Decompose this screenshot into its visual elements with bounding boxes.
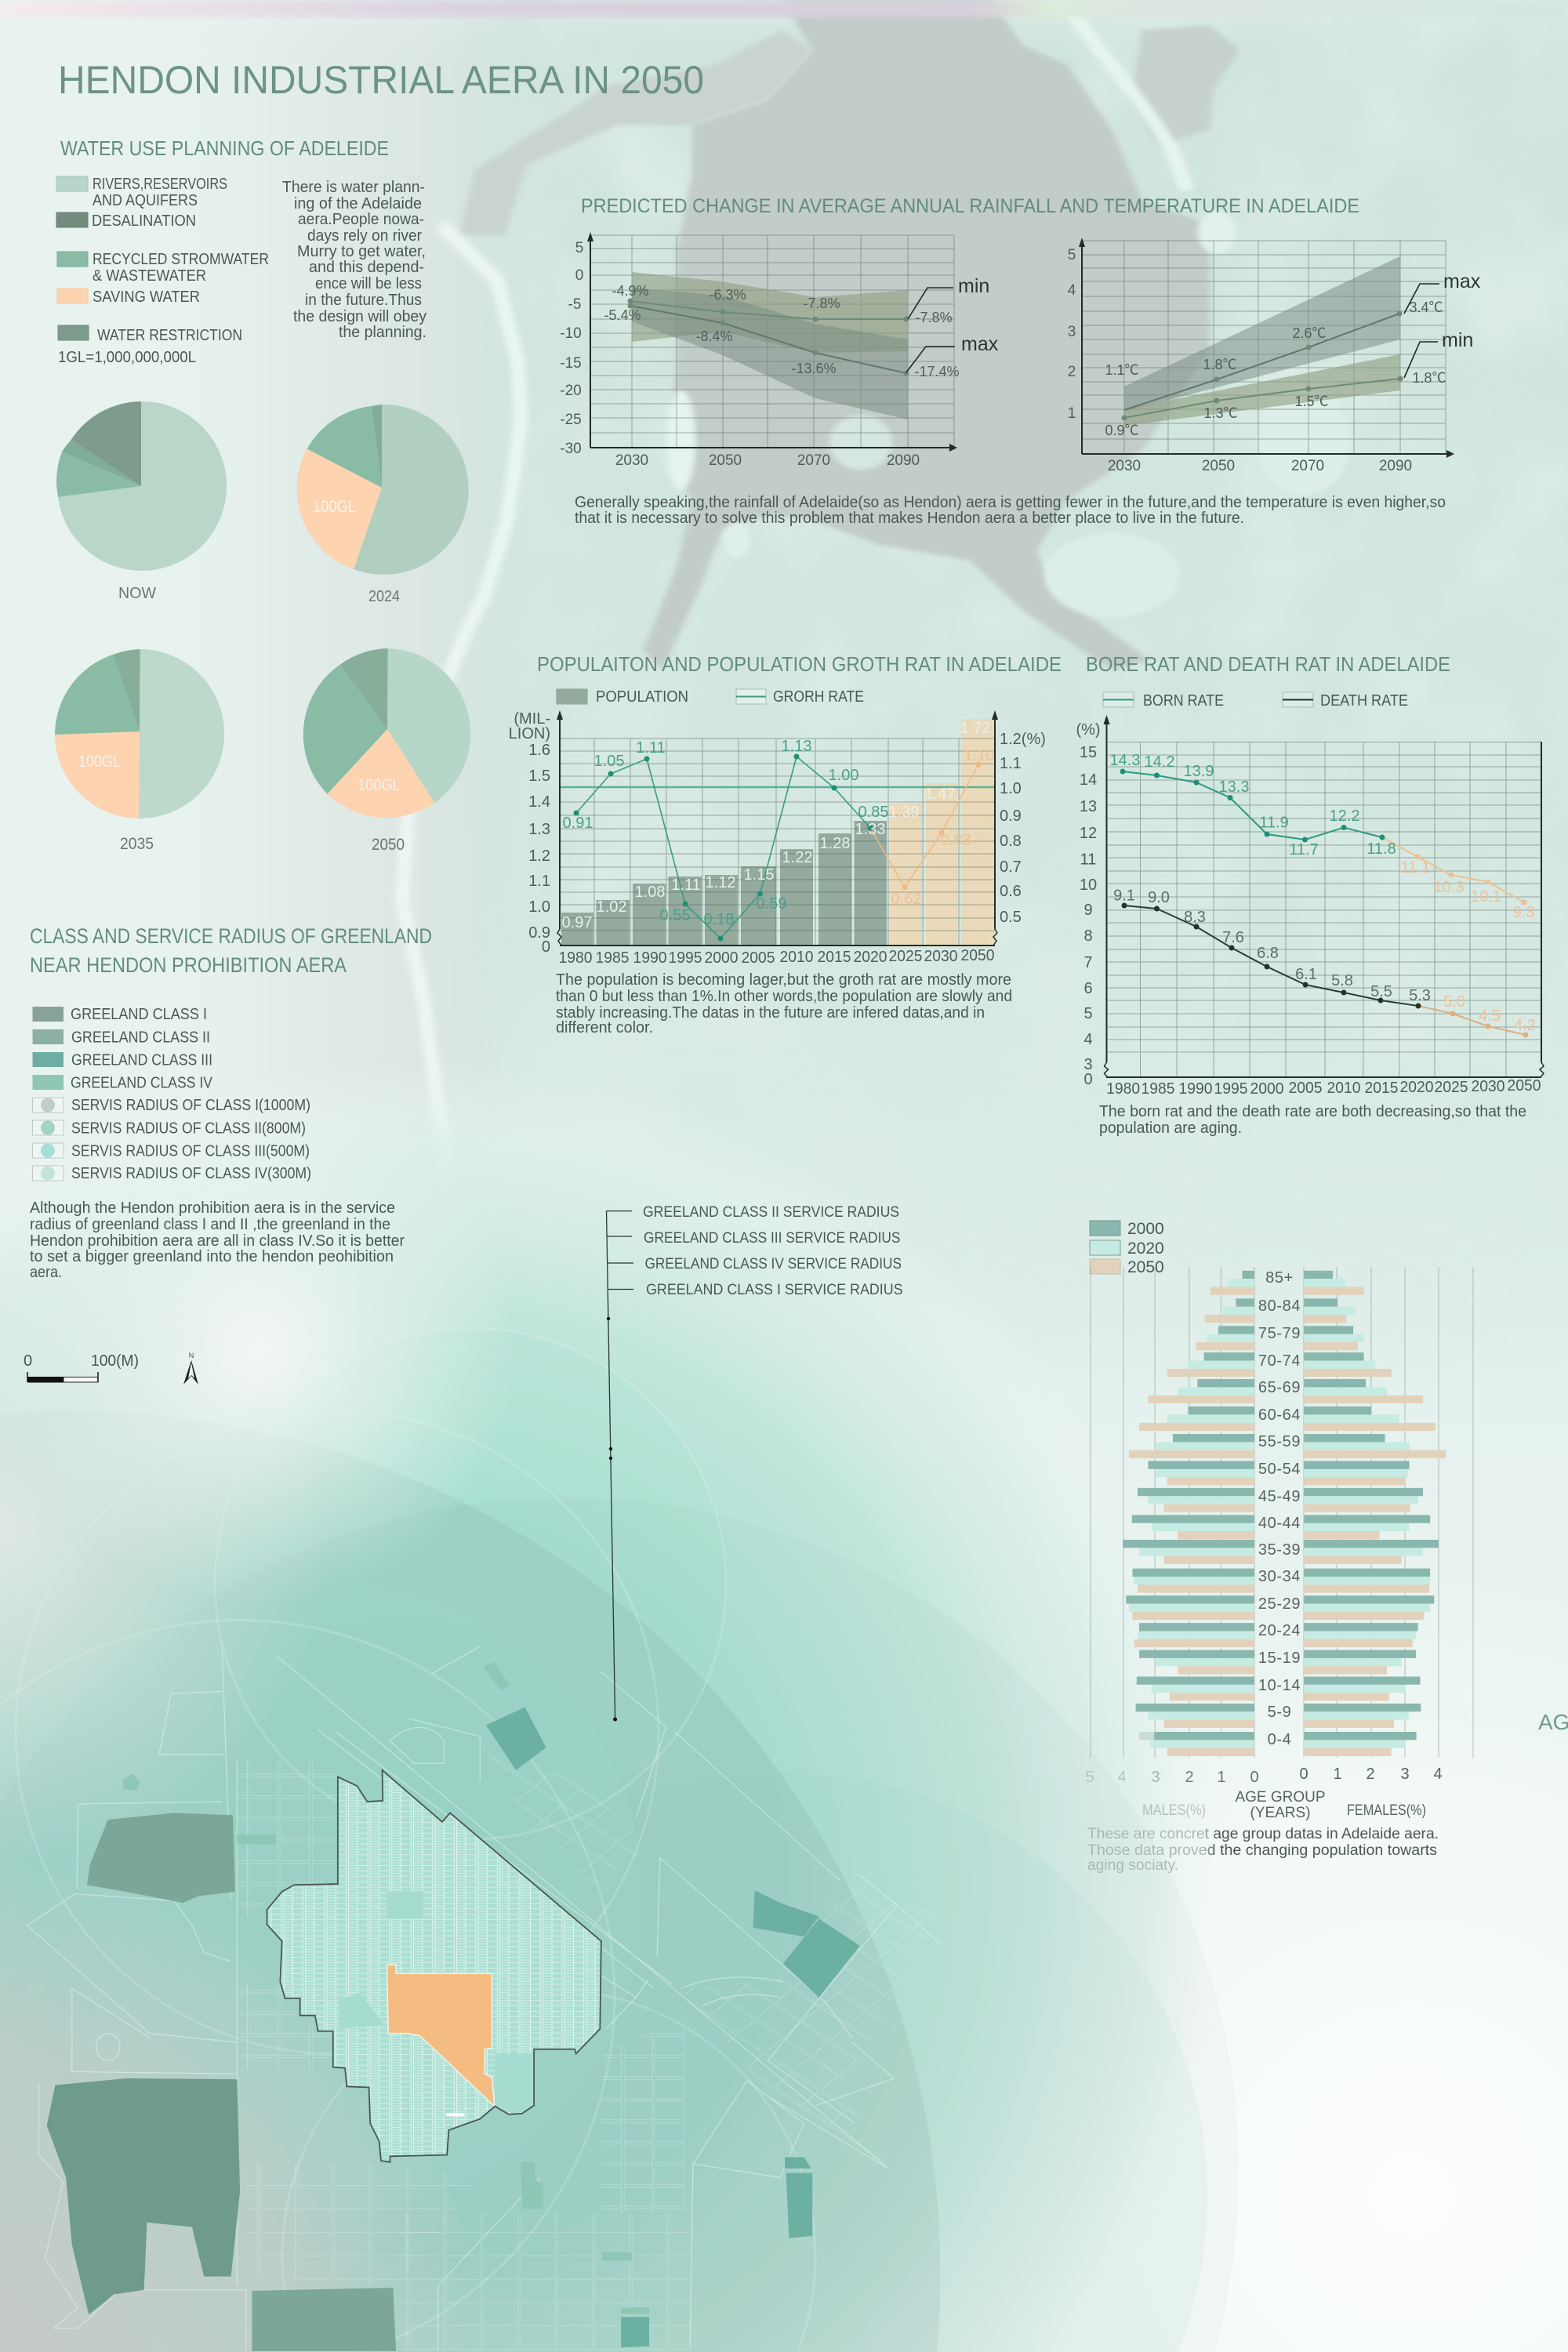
text block: pyramid note: Those data proved the changing population towarts bbox=[1087, 1842, 1437, 1859]
chart: temperature change: 2090 bbox=[1379, 458, 1412, 474]
chart: temperature change: 1.5℃ bbox=[1294, 394, 1329, 409]
chart: rainfall change: -30 bbox=[560, 441, 582, 457]
axis labels: percent: FEMALES(%) bbox=[1347, 1802, 1426, 1819]
prohibition area boundary bbox=[267, 1770, 601, 2162]
text block: water planning note: ence will be less bbox=[315, 275, 422, 292]
heading: greenland class: NEAR HENDON PROHIBITION AERA bbox=[30, 953, 347, 977]
chart: population and growth rate: 1.15 bbox=[744, 866, 774, 884]
callouts: service radius leader bbox=[607, 1204, 903, 1722]
legend: pyramid years: 2020 bbox=[1127, 1240, 1164, 1258]
heading: rainfall and temperature: PREDICTED CHANGE IN AVERAGE ANNUAL RAINFALL AND TEMPERATURE IN ADELAIDE bbox=[581, 195, 1359, 217]
axis labels: birth and death: 2005 bbox=[1289, 1080, 1322, 1097]
chart: temperature change: 1.8℃ bbox=[1412, 370, 1446, 386]
pie chart: 2050 bbox=[303, 648, 470, 854]
axis labels: age groups: 70-74 bbox=[1258, 1352, 1301, 1370]
streets: outer blocks bbox=[27, 1646, 941, 2350]
chart: birth and death rate: 11.7 bbox=[1289, 841, 1319, 858]
chart: population and growth rate bbox=[509, 688, 1046, 967]
text block: population note: The population is becoming lager,but the groth rat are mostly more bbox=[556, 971, 1011, 989]
chart: rainfall change: -6.3% bbox=[709, 287, 746, 303]
chart: rainfall change: -20 bbox=[560, 383, 582, 399]
axis labels: percent: 1 bbox=[1217, 1769, 1226, 1786]
axis labels: percent: 0 bbox=[1250, 1769, 1259, 1786]
axis labels: population: 1.0 bbox=[528, 898, 550, 916]
pie chart: 2024 bbox=[297, 405, 469, 605]
icon: north arrow bbox=[183, 1352, 198, 1385]
axis labels: age groups: 65-69 bbox=[1258, 1379, 1301, 1396]
axis labels: birth and death: 2000 bbox=[1250, 1080, 1284, 1098]
axis labels: birth and death bbox=[1076, 721, 1541, 1098]
chart: birth and death rate: 4.5 bbox=[1479, 1007, 1501, 1025]
legend: pyramid years: 2000 bbox=[1127, 1220, 1164, 1238]
chart: population and growth rate: 1.33 bbox=[855, 821, 885, 838]
chart: birth and death rate: 11.8 bbox=[1367, 840, 1396, 858]
legend: water sources: WATER RESTRICTION bbox=[97, 327, 242, 344]
legend: water sources: 1GL=1,000,000,000L bbox=[58, 349, 196, 366]
chart: population and growth rate: 0.5 bbox=[1000, 909, 1022, 926]
legend: greenland classes and service radius: GREELAND CLASS III bbox=[71, 1052, 212, 1069]
chart: birth and death rate: 14.2 bbox=[1145, 753, 1174, 771]
orange site bbox=[387, 1965, 495, 2107]
text block: water planning note: the design will obey bbox=[293, 308, 426, 325]
pie chart: 2035 bbox=[55, 649, 224, 853]
chart: temperature change: 4 bbox=[1068, 282, 1076, 299]
axis labels: birth and death: (%) bbox=[1076, 721, 1101, 739]
legend: greenland classes and service radius: SERVIS RADIUS OF CLASS IV(300M) bbox=[71, 1165, 311, 1182]
chart: temperature change: 5 bbox=[1068, 247, 1076, 263]
text block: greenland note: aera. bbox=[30, 1264, 62, 1281]
greenland: class II bbox=[87, 1813, 396, 2351]
axis labels: percent: (YEARS) bbox=[1250, 1805, 1311, 1821]
chart: population and growth rate: 0.7 bbox=[1000, 858, 1022, 876]
chart: population and growth rate: 0.91 bbox=[563, 815, 593, 832]
chart: rainfall change: 0 bbox=[575, 267, 583, 284]
chart: population and growth rate: 0.18 bbox=[704, 911, 734, 928]
scale bar bbox=[24, 1352, 139, 1383]
legend: water sources bbox=[56, 176, 269, 366]
axis labels: percent: MALES(%) bbox=[1142, 1802, 1206, 1819]
chart: birth and death rate: 5.5 bbox=[1370, 983, 1392, 1000]
chart: rainfall change: -5 bbox=[568, 296, 581, 313]
chart: birth and death rate: 9.0 bbox=[1148, 889, 1170, 906]
legend: water sources: DESALINATION bbox=[92, 212, 196, 230]
axis labels: age groups: 85+ bbox=[1265, 1269, 1294, 1287]
axis labels: birth and death: 5 bbox=[1083, 1005, 1093, 1022]
legend: water sources: RIVERS,RESERVOIRS bbox=[93, 176, 227, 193]
chart: population and growth rate: 0.62 bbox=[891, 891, 921, 908]
chart: temperature change: 1.8℃ bbox=[1203, 357, 1237, 372]
axis labels: age groups: 5-9 bbox=[1268, 1704, 1291, 1721]
chart: population and growth rate: 1.1 bbox=[1000, 755, 1022, 772]
axis labels: birth and death: 2020 bbox=[1400, 1079, 1433, 1096]
chart: temperature change: 2030 bbox=[1108, 458, 1141, 474]
axis labels: percent: 1 bbox=[1333, 1766, 1342, 1783]
heading: water use: WATER USE PLANNING OF ADELEIDE bbox=[60, 136, 389, 160]
axis labels: birth and death: 9 bbox=[1083, 902, 1093, 919]
white marker bbox=[446, 2113, 464, 2116]
axis labels: birth and death: 0 bbox=[1083, 1071, 1093, 1088]
text block: rainfall summary: that it is necessary to solve this problem that makes Hendon aera a better place to live in the future. bbox=[575, 510, 1244, 527]
chart: birth and death rate: 5.3 bbox=[1409, 987, 1431, 1004]
chart: population and growth rate: 1.12 bbox=[706, 874, 735, 891]
chart: rainfall change bbox=[560, 232, 999, 469]
axis labels: birth and death: 14 bbox=[1080, 771, 1097, 789]
axis labels: population: 1.3 bbox=[528, 821, 550, 838]
text block: water planning note: and this depend- bbox=[309, 259, 424, 276]
bars: population bbox=[561, 821, 887, 946]
axis labels: birth and death: 4 bbox=[1083, 1031, 1093, 1048]
chart: birth and death rate: 13.3 bbox=[1219, 779, 1249, 796]
axis labels: birth and death: 12 bbox=[1080, 825, 1097, 842]
chart: population and growth rate: 1.47 bbox=[925, 786, 955, 803]
chart: birth and death rate: 4.2 bbox=[1514, 1017, 1536, 1034]
heading: greenland class: CLASS AND SERVICE RADIUS OF GREENLAND bbox=[30, 924, 432, 948]
chart: population and growth rate: 0.59 bbox=[757, 895, 786, 913]
text block: water planning note: days rely on river bbox=[307, 227, 422, 245]
chart: population and growth rate: 1.02 bbox=[597, 898, 626, 916]
legend: greenland classes and service radius: SERVIS RADIUS OF CLASS II(800M) bbox=[71, 1120, 306, 1138]
pie chart: 2050: 2050 bbox=[372, 836, 405, 854]
axis labels: birth and death: 15 bbox=[1080, 744, 1097, 761]
chart: temperature change: 1 bbox=[1068, 405, 1076, 422]
axis labels: age groups: 75-79 bbox=[1258, 1325, 1301, 1342]
axis labels: percent: 5 bbox=[1085, 1769, 1094, 1786]
chart: population and growth rate: 1.28 bbox=[820, 835, 850, 852]
chart: rainfall change: 2030 bbox=[615, 452, 648, 469]
chart: population and growth rate: 1.72 bbox=[960, 720, 990, 737]
chart: rainfall change: -7.8% bbox=[803, 296, 840, 311]
axis labels: age groups: 60-64 bbox=[1258, 1406, 1301, 1424]
chart: birth and death rate: 5.0 bbox=[1443, 993, 1465, 1011]
chart: birth and death rate: 12.2 bbox=[1330, 808, 1359, 825]
axis labels: population: 1.6 bbox=[528, 742, 550, 759]
chart: rainfall change: -25 bbox=[560, 412, 582, 428]
chart: population and growth rate: 2020 bbox=[853, 949, 887, 966]
axis labels: birth and death: 2025 bbox=[1435, 1079, 1468, 1096]
axis labels: birth and death: 6 bbox=[1083, 980, 1093, 997]
axis labels: birth and death: 3 bbox=[1083, 1056, 1093, 1073]
legend: water sources: & WASTEWATER bbox=[93, 267, 206, 285]
axis labels: population: (MIL- bbox=[514, 710, 550, 728]
legend: water sources: AND AQUIFERS bbox=[93, 192, 198, 209]
chart: temperature change: 1.1℃ bbox=[1105, 362, 1139, 378]
axis labels: birth and death: 7 bbox=[1083, 954, 1093, 971]
axis labels: birth and death: 1980 bbox=[1106, 1080, 1140, 1098]
pie chart: 2035: 100GL bbox=[78, 753, 121, 771]
text block: pyramid note: aging sociaty. bbox=[1087, 1857, 1178, 1874]
text block: rainfall summary bbox=[575, 494, 1446, 527]
chart: birth and death rate: 9.1 bbox=[1113, 887, 1135, 905]
chart: temperature change: 2 bbox=[1068, 364, 1076, 380]
callout: max: max bbox=[1443, 270, 1481, 292]
text block: population note: different color. bbox=[556, 1019, 653, 1036]
axis labels: birth and death: 8 bbox=[1083, 927, 1093, 945]
icon: north arrow: N bbox=[189, 1352, 194, 1359]
axis labels: percent: 0 bbox=[1299, 1766, 1308, 1783]
chart: birth and death rate: 11.9 bbox=[1259, 814, 1289, 831]
chart: rainfall change: -7.8% bbox=[915, 310, 953, 325]
pie chart: 2024: 100GL bbox=[313, 498, 356, 516]
callout: min bbox=[908, 275, 989, 319]
axis labels: population: 1.5 bbox=[528, 768, 550, 785]
axis labels: age groups: 55-59 bbox=[1258, 1433, 1301, 1450]
pie chart: 2024: 2024 bbox=[368, 588, 400, 605]
text block: greenland note: radius of greenland class I and II ,the greenland in the bbox=[30, 1216, 390, 1233]
axis labels: percent: AGE GROUP bbox=[1235, 1789, 1326, 1806]
pie chart: now: NOW bbox=[118, 585, 156, 602]
chart: population and growth rate: 1985 bbox=[596, 949, 629, 967]
callout: min: min bbox=[958, 275, 989, 297]
callouts: service radius leader: GREELAND CLASS III SERVICE RADIUS bbox=[644, 1230, 900, 1247]
legend: population: GRORH RATE bbox=[773, 688, 864, 706]
chart: population and growth rate: 2050 bbox=[961, 947, 994, 964]
text block: greenland note: Hendon prohibition aera are all in class IV.So it is better bbox=[30, 1232, 405, 1250]
chart: population and growth rate: 1.05 bbox=[594, 753, 624, 770]
axis labels: population: 0.9 bbox=[528, 924, 550, 942]
chart: population and growth rate: 2015 bbox=[817, 949, 851, 966]
axis labels: percent: 2 bbox=[1185, 1769, 1194, 1786]
axis labels: population: 1.2 bbox=[528, 848, 550, 865]
text block: pyramid note: These are concret age group datas in Adelaide aera. bbox=[1087, 1826, 1439, 1842]
callout: min: min bbox=[1442, 329, 1473, 351]
callout: max: max bbox=[961, 333, 999, 355]
callouts: service radius leader: GREELAND CLASS I SERVICE RADIUS bbox=[646, 1282, 903, 1298]
chart: population and growth rate: 1.0 bbox=[1000, 780, 1022, 797]
greenland: class III bbox=[486, 1707, 860, 2347]
axis labels: age groups: 30-34 bbox=[1258, 1568, 1301, 1585]
axis labels: birth and death: 2010 bbox=[1327, 1080, 1361, 1097]
chart: rainfall change: -8.4% bbox=[695, 328, 733, 344]
chart: population and growth rate: 2030 bbox=[924, 948, 958, 965]
chart: population and growth rate: 1.39 bbox=[889, 804, 919, 821]
text block: water planning note: in the future.Thus bbox=[305, 292, 422, 309]
pie chart: 2035: 2035 bbox=[120, 835, 154, 853]
axis labels: percent: 4 bbox=[1117, 1769, 1127, 1786]
text block: water planning note bbox=[282, 179, 426, 341]
text block: birth and death note: population are aging. bbox=[1099, 1120, 1242, 1137]
map: Hendon greenland and street network bbox=[27, 1646, 941, 2351]
text block: water planning note: ing of the Adelaide bbox=[294, 195, 422, 212]
chart: temperature change: 0.9℃ bbox=[1105, 423, 1139, 438]
greenland: class IV bbox=[123, 1662, 649, 2314]
text block: birth and death note: The born rat and the death rate are both decreasing,so that the bbox=[1099, 1103, 1526, 1120]
pie chart: now bbox=[56, 401, 227, 602]
chart: population and growth rate: 2000 bbox=[704, 949, 739, 967]
chart: rainfall change: 2090 bbox=[887, 452, 920, 469]
axis labels: age groups: 25-29 bbox=[1258, 1595, 1301, 1613]
axis labels: birth and death: 11 bbox=[1080, 851, 1096, 869]
chart: population and growth rate: 0.55 bbox=[660, 907, 690, 924]
legend: greenland classes and service radius bbox=[33, 1006, 311, 1182]
chart: population and growth rate: 0.97 bbox=[562, 914, 592, 931]
chart: temperature change: 3 bbox=[1068, 324, 1076, 340]
chart: population and growth rate: 0.6 bbox=[1000, 883, 1022, 900]
heading: population: POPULAITON AND POPULATION GROTH RAT IN ADELAIDE bbox=[537, 652, 1062, 676]
chart: rainfall change: -15 bbox=[560, 355, 582, 372]
axis labels: age groups: 10-14 bbox=[1258, 1677, 1301, 1694]
legend: greenland classes and service radius: GREELAND CLASS IV bbox=[71, 1074, 213, 1091]
chart: rainfall change: -10 bbox=[560, 325, 582, 342]
axis labels: birth and death: 13 bbox=[1080, 798, 1097, 815]
axis labels: age groups bbox=[1258, 1269, 1301, 1748]
chart: birth and death rate bbox=[1076, 692, 1544, 1098]
text block: water planning note: the planning. bbox=[339, 324, 426, 341]
text block: water planning note: There is water plann- bbox=[282, 179, 425, 196]
axis labels: percent: 4 bbox=[1433, 1766, 1443, 1783]
chart: birth and death rate: 10.3 bbox=[1434, 879, 1464, 896]
axis labels: age groups: 40-44 bbox=[1258, 1515, 1301, 1532]
chart: birth and death rate: 7.6 bbox=[1222, 929, 1244, 946]
chart: population and growth rate: 1.00 bbox=[829, 767, 858, 784]
callout: max bbox=[1404, 270, 1481, 314]
chart: temperature change: 1.3℃ bbox=[1203, 405, 1238, 421]
axis labels: age groups: 20-24 bbox=[1258, 1622, 1301, 1639]
title: HENDON INDUSTRIAL AERA IN 2050 bbox=[58, 58, 704, 102]
axis labels: birth and death: 2050 bbox=[1507, 1077, 1541, 1094]
chart: population and growth rate: 0.9 bbox=[1000, 808, 1022, 825]
axis labels: age groups: 35-39 bbox=[1258, 1541, 1301, 1559]
text block: water planning note: Murry to get water, bbox=[297, 243, 426, 260]
axis labels: population: 1.1 bbox=[528, 873, 550, 890]
axis labels: age groups: 45-49 bbox=[1258, 1488, 1301, 1505]
chart: population and growth rate: 1.11 bbox=[636, 739, 666, 757]
text block: rainfall summary: Generally speaking,the rainfall of Adelaide(so as Hendon) aera is getting fewer in the future,and the temperature is even higher,so bbox=[575, 494, 1446, 511]
chart: population and growth rate: 1995 bbox=[668, 949, 702, 967]
text block: population note: stably increasing.The datas in the future are infered datas,and in bbox=[556, 1004, 985, 1022]
chart: population and growth rate: 1.08 bbox=[635, 884, 665, 901]
legend: birth and death bbox=[1103, 692, 1408, 710]
callouts: service radius leader: GREELAND CLASS II SERVICE RADIUS bbox=[643, 1204, 899, 1221]
chart: population and growth rate: 2005 bbox=[742, 949, 775, 967]
chart: population and growth rate: 1.13 bbox=[782, 738, 811, 755]
chart: temperature change: 2050 bbox=[1202, 458, 1235, 474]
chart: birth and death rate: 13.9 bbox=[1184, 763, 1214, 780]
chart: population and growth rate: 0.8 bbox=[1000, 833, 1022, 850]
bars: pyramid bbox=[1123, 1271, 1446, 1756]
legend: greenland classes and service radius: GREELAND CLASS I bbox=[71, 1006, 207, 1023]
legend: greenland classes and service radius: SERVIS RADIUS OF CLASS III(500M) bbox=[71, 1143, 310, 1160]
chart: temperature change: 2.6℃ bbox=[1292, 325, 1327, 341]
chart: birth and death rate: 5.8 bbox=[1331, 972, 1353, 989]
chart: birth and death rate: 11.1 bbox=[1401, 859, 1430, 877]
text block: population note bbox=[556, 971, 1012, 1036]
chart: population and growth rate: 0.83 bbox=[941, 832, 971, 849]
axis labels: birth and death: 2015 bbox=[1364, 1080, 1399, 1097]
text block: water planning note: aera.People nowa- bbox=[298, 211, 424, 228]
chart: temperature change: 2070 bbox=[1291, 458, 1324, 474]
axis labels: age groups: 80-84 bbox=[1258, 1298, 1301, 1315]
chart: birth and death rate: 8.3 bbox=[1184, 909, 1206, 926]
bars: inferred population bbox=[890, 719, 995, 946]
text block: greenland note bbox=[30, 1200, 405, 1281]
legend: population bbox=[557, 688, 864, 706]
heading: greenland class bbox=[30, 924, 432, 977]
heading: birth and death: BORE RAT AND DEATH RAT IN ADELAIDE bbox=[1086, 652, 1450, 676]
axis labels: birth and death: 2030 bbox=[1471, 1078, 1505, 1095]
axis labels: birth and death: 1990 bbox=[1179, 1080, 1212, 1098]
chart: rainfall change: -17.4% bbox=[914, 364, 960, 379]
text block: birth and death note bbox=[1099, 1103, 1526, 1137]
chart: population and growth rate: 1980 bbox=[558, 949, 593, 967]
text block: population note: than 0 but less than 1%.In other words,the population are slowly and bbox=[556, 988, 1012, 1005]
axis labels: age groups: 50-54 bbox=[1258, 1461, 1301, 1478]
axis labels: age groups: 15-19 bbox=[1258, 1650, 1301, 1667]
callout: min bbox=[1404, 329, 1473, 378]
legend: pyramid years: 2050 bbox=[1127, 1258, 1164, 1276]
text block: pyramid note bbox=[1087, 1826, 1439, 1874]
panel: water use planning bbox=[55, 136, 470, 854]
chart: birth and death rate: 9.3 bbox=[1513, 904, 1534, 921]
axis labels: percent: 3 bbox=[1400, 1766, 1410, 1783]
text block: greenland note: to set a bigger greenland into the hendon peohibition bbox=[30, 1248, 394, 1265]
chart: rainfall change: 2070 bbox=[797, 452, 830, 469]
legend: greenland classes and service radius: SERVIS RADIUS OF CLASS I(1000M) bbox=[71, 1097, 310, 1114]
chart: population and growth rate: 0.85 bbox=[858, 804, 888, 821]
legend: greenland classes and service radius: GREELAND CLASS II bbox=[71, 1029, 210, 1046]
chart: rainfall change: 2050 bbox=[709, 452, 742, 469]
chart: population and growth rate: 1.22 bbox=[782, 849, 812, 866]
Hendon prohibition area plots bbox=[268, 1772, 601, 2161]
axis labels: population: 1.4 bbox=[528, 793, 550, 811]
chart: population and growth rate: 1.2(%) bbox=[1000, 731, 1046, 748]
chart: population and growth rate: 1.11 bbox=[671, 877, 701, 894]
chart: temperature change: 3.4℃ bbox=[1409, 299, 1443, 315]
axis labels: age groups: 0-4 bbox=[1268, 1731, 1291, 1748]
chart: population and growth rate: 2025 bbox=[889, 948, 922, 965]
chart: age pyramid bbox=[1085, 1220, 1473, 1821]
chart: population and growth rate: 1990 bbox=[633, 949, 666, 967]
legend: water sources: RECYCLED STROMWATER bbox=[93, 251, 269, 268]
callout: max bbox=[906, 333, 999, 372]
axis labels: population: LION) bbox=[509, 725, 550, 742]
axis labels: birth and death: 10 bbox=[1080, 877, 1097, 894]
chart: temperature change bbox=[1068, 238, 1481, 474]
chart: rainfall change: -13.6% bbox=[791, 361, 837, 376]
axis labels: birth and death: 1995 bbox=[1214, 1080, 1248, 1098]
callouts: service radius leader: GREELAND CLASS IV SERVICE RADIUS bbox=[644, 1256, 902, 1272]
axis labels: population: 0 bbox=[542, 938, 550, 956]
greenland: class I bbox=[47, 2078, 240, 2314]
chart: rainfall change: -4.9% bbox=[612, 283, 649, 299]
chart: rainfall change: 5 bbox=[575, 240, 583, 256]
axis labels: percent: 2 bbox=[1366, 1766, 1375, 1783]
chart: birth and death rate: 14.3 bbox=[1110, 752, 1140, 769]
scale bar: 100(M) bbox=[91, 1352, 139, 1370]
axis labels: birth and death: 1985 bbox=[1142, 1080, 1174, 1098]
chart: rainfall change: -5.4% bbox=[604, 307, 641, 323]
axis labels: population bbox=[509, 710, 550, 956]
legend: water sources: SAVING WATER bbox=[93, 289, 200, 306]
chart: birth and death rate: 6.8 bbox=[1257, 945, 1279, 962]
legend: population: POPULATION bbox=[596, 688, 688, 706]
legend: pyramid years bbox=[1090, 1220, 1164, 1276]
axis labels: percent bbox=[1085, 1766, 1443, 1821]
scale bar: 0 bbox=[24, 1352, 32, 1370]
legend: birth and death: BORN RATE bbox=[1143, 692, 1224, 710]
chart: population and growth rate: 2010 bbox=[779, 949, 814, 966]
pie chart: 2050: 100GL bbox=[358, 776, 401, 794]
axis labels: percent: 3 bbox=[1151, 1769, 1160, 1786]
chart: birth and death rate: 6.1 bbox=[1295, 966, 1317, 983]
text block: greenland note: Although the Hendon prohibition aera is in the service bbox=[30, 1200, 395, 1217]
legend: birth and death: DEATH RATE bbox=[1320, 692, 1408, 710]
chart: population and growth rate: 1.10 bbox=[964, 747, 994, 764]
chart: birth and death rate: 10.1 bbox=[1471, 888, 1501, 906]
background: service radius circles over map bbox=[0, 1058, 1254, 2352]
